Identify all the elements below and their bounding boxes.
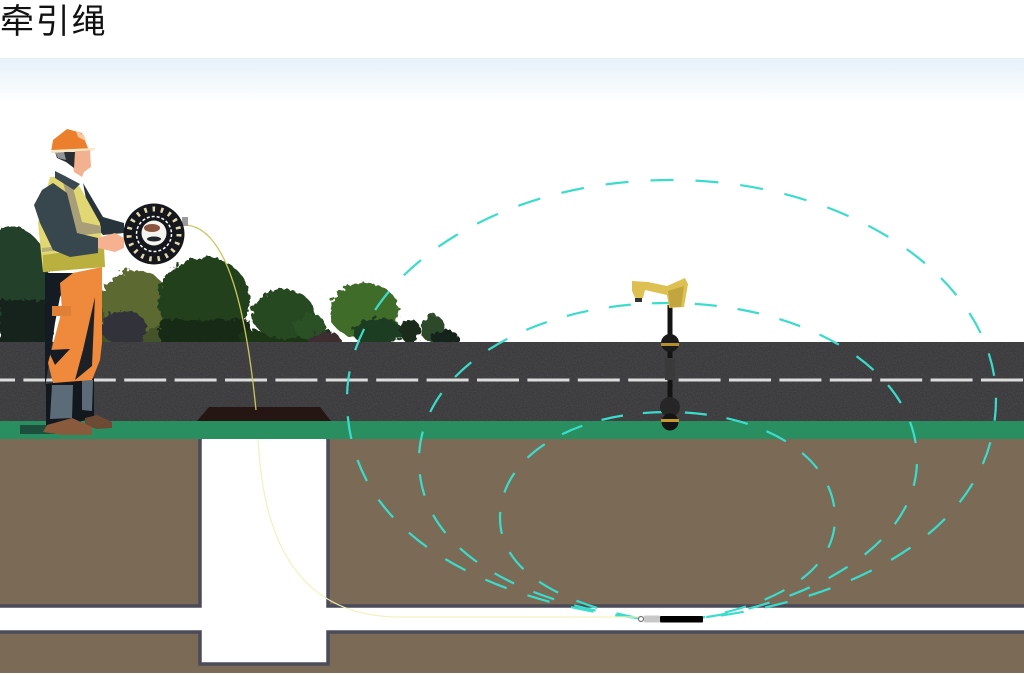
- signal locator: [632, 278, 688, 430]
- hi-vis vest: [38, 177, 105, 272]
- grass strip: [0, 421, 1024, 439]
- trees: [0, 226, 459, 348]
- manhole opening cover: [197, 407, 331, 421]
- signal field: inner ring: [500, 412, 835, 618]
- neck and face: [72, 150, 91, 177]
- underground duct and manhole: [0, 439, 1024, 664]
- ground layer: [0, 439, 1024, 673]
- worker: [20, 129, 124, 435]
- far arm: [83, 183, 124, 235]
- hair: [55, 152, 75, 168]
- signal field: outer ring: [347, 180, 996, 618]
- cable reel: [124, 204, 188, 264]
- helmet: [51, 129, 95, 153]
- sky band: [0, 58, 1024, 104]
- sonde: [638, 616, 703, 622]
- hand: [98, 233, 124, 252]
- tow rope: [186, 225, 640, 617]
- lower legs: [46, 378, 94, 428]
- signal field: middle ring: [419, 303, 917, 618]
- trousers: [48, 267, 102, 383]
- road: [0, 342, 1024, 421]
- near arm: [34, 183, 98, 257]
- shadow: [20, 425, 75, 434]
- trousers back shade: [45, 273, 73, 387]
- road centre line: [0, 378, 1024, 382]
- collar: [55, 171, 80, 190]
- title: 牵引绳: [0, 3, 107, 41]
- boots: [85, 415, 112, 429]
